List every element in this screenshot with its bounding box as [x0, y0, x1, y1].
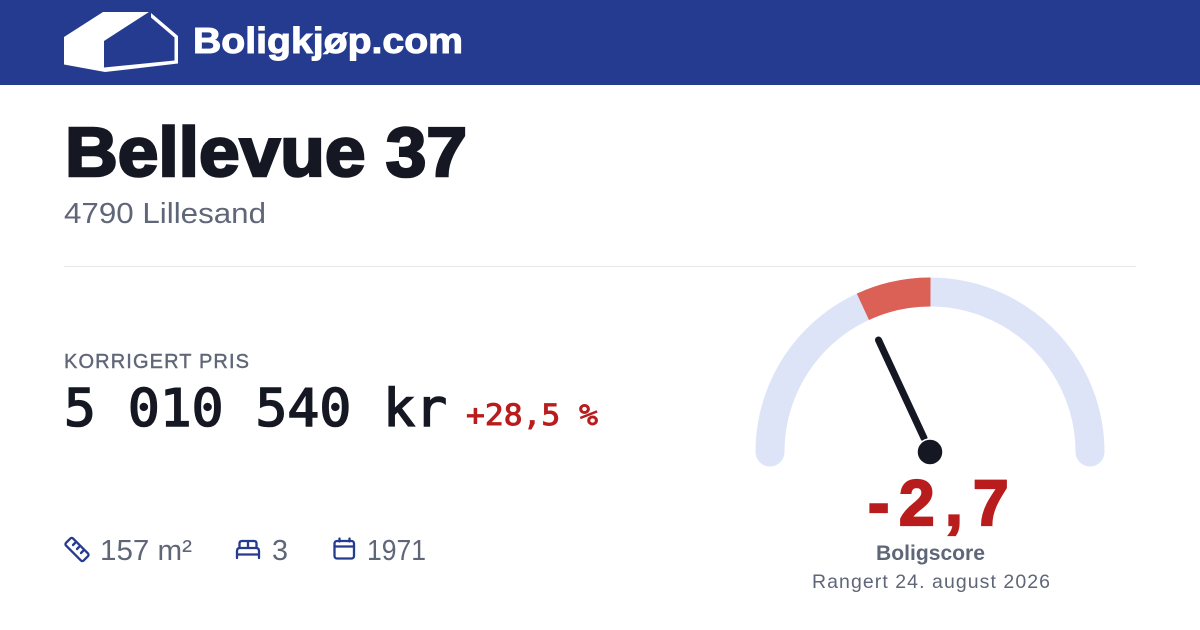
gauge track [770, 292, 1090, 452]
property facts [65, 535, 426, 567]
price label: KORRIGERT PRIS [64, 351, 249, 373]
gauge needle [878, 340, 924, 438]
area value: 157 m² [100, 535, 192, 567]
gauge red segment [863, 292, 930, 307]
ranking date: Rangert 24. august 2026 [812, 571, 1050, 593]
icon: bed [237, 541, 259, 558]
gauge hub [917, 439, 943, 465]
icon: calendar [334, 538, 354, 558]
score label: Boligscore [876, 542, 985, 565]
title: Bellevue 37 [65, 113, 467, 191]
subtitle: address: 4790 Lillesand [64, 198, 266, 230]
score gauge [770, 292, 1090, 465]
year built value: 1971 [367, 535, 426, 567]
price block [64, 351, 598, 439]
icon: house logo [64, 12, 178, 72]
icon: ruler [65, 537, 89, 562]
header bar [0, 0, 1200, 85]
price change: +28,5 % [466, 398, 598, 432]
bedrooms value: 3 [272, 535, 288, 567]
score value: -2,7 [868, 467, 1009, 539]
logo wordmark: Boligkjøp.com [193, 20, 463, 61]
price value: 5 010 540 kr [64, 379, 447, 439]
